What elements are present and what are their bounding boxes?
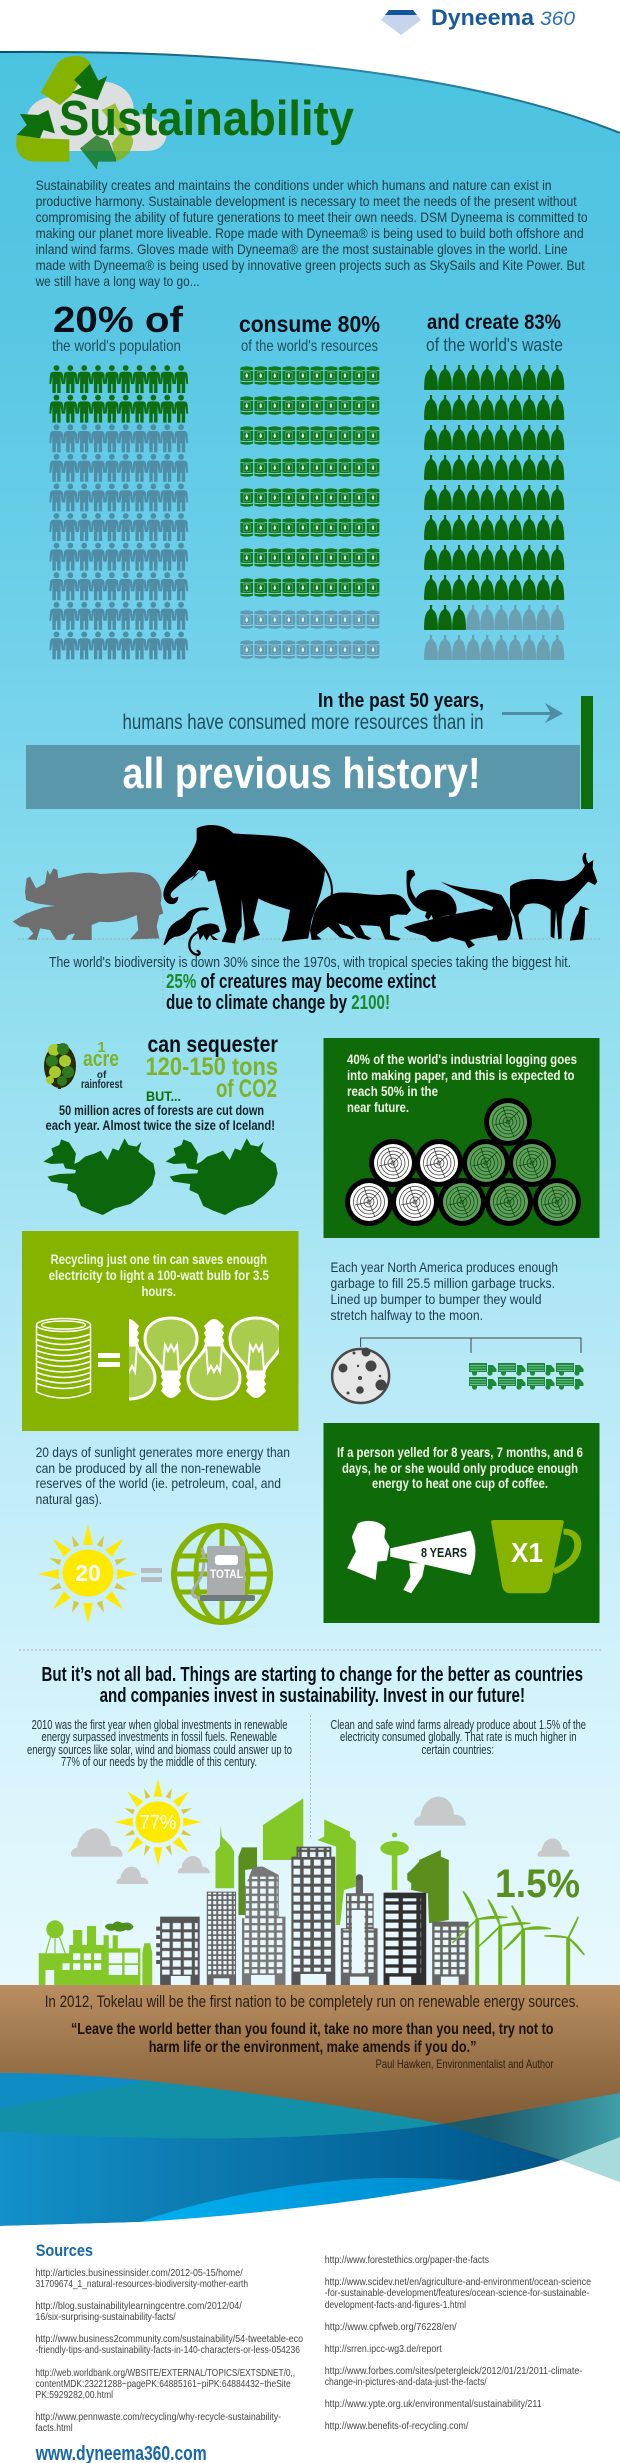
icon: globe with fuel pump xyxy=(172,1526,272,1622)
icon: chameleon xyxy=(197,923,220,941)
intro text: Sustainability creates and maintains the conditions under which humans and nature can exist in xyxy=(36,177,552,193)
panel: rainforest: rainforest xyxy=(81,1079,123,1091)
banner: all previous history xyxy=(26,696,593,809)
wind turbines xyxy=(453,1892,584,1985)
quote xyxy=(71,2021,554,2056)
icon: clouds xyxy=(71,1797,570,1884)
decorative waves xyxy=(0,2073,620,2226)
icon: cormorant xyxy=(570,906,590,941)
panel: rainforest: 120-150 tons xyxy=(146,1053,278,1081)
quote: harm life or the environment, make amends if you do.” xyxy=(149,2039,476,2056)
icon: antelope xyxy=(510,853,597,939)
quote attribution: Paul Hawken, Environmentalist and Author xyxy=(376,2057,554,2071)
icon: sun 77%: 77% xyxy=(140,1812,177,1834)
sources list left: 16/six-surprising-sustainability-facts/ xyxy=(36,2311,176,2323)
panel: recycling a tin can: electricity to light a 100-watt bulb for 3.5 xyxy=(49,1267,269,1283)
cloud xyxy=(26,81,167,151)
icon: tree xyxy=(44,1043,76,1089)
logo: Dyneema 360: 360 xyxy=(540,9,575,30)
panel: rainforest: of CO2 xyxy=(216,1075,277,1103)
icon: tin can xyxy=(36,1318,90,1398)
icon: coffee mug xyxy=(491,1520,578,1593)
heading: in the past 50 years: In the past 50 years, xyxy=(318,690,484,712)
icon: sun 20: 20 xyxy=(75,1560,101,1586)
sunlight text: natural gas). xyxy=(36,1491,102,1507)
panel: paper logging: into making paper, and this is expected to xyxy=(347,1067,574,1083)
sunlight text xyxy=(36,1444,290,1507)
panel: yelling and coffee: energy to heat one cup of coffee. xyxy=(372,1475,548,1491)
panel: rainforest: can sequester xyxy=(148,1031,278,1057)
icon: recycling symbol over cloud xyxy=(16,56,167,169)
icon: moon xyxy=(332,1348,389,1403)
illustration: endangered animals, right group xyxy=(310,853,597,948)
sunlight text: 20 days of sunlight generates more energy than xyxy=(36,1444,290,1460)
sources list left: contentMDK:23221288~pagePK:64885161~piPK:64884432~theSite xyxy=(36,2378,291,2390)
icon: toucan xyxy=(163,907,209,945)
chart: barrels pictogram xyxy=(240,366,379,659)
heading: in the past 50 years xyxy=(122,690,484,734)
stat: create 83% of waste: and create 83% xyxy=(427,311,561,334)
panel: rainforest: BUT... xyxy=(146,1088,181,1104)
garbage text: Each year North America produces enough xyxy=(330,1259,558,1275)
panel: yelling and coffee: 8 YEARS xyxy=(421,1545,467,1560)
icon: crocodile xyxy=(404,882,513,948)
sources list left: facts.html xyxy=(36,2422,73,2434)
panel: rainforest: acre xyxy=(83,1046,119,1071)
sources list right: http://srren.ipcc-wg3.de/report xyxy=(325,2343,442,2355)
stat: 1.5%: 1.5% xyxy=(495,1862,580,1906)
icon: grey equals xyxy=(141,1568,162,1582)
arrow band top xyxy=(41,56,91,105)
sources list right: change-in-pictures-and-data-just-the-facts/ xyxy=(325,2376,487,2388)
sources list left: http://www.business2community.com/sustainability/54-tweetable-eco xyxy=(36,2333,303,2345)
sources list left: PK:5929282,00.html xyxy=(36,2389,113,2401)
text: renewable investment: energy surpassed investments in fossil fuels. Renewable xyxy=(42,1730,277,1744)
icon: Iceland maps xyxy=(43,1138,278,1215)
panel: rainforest: each year. Almost twice the size of Iceland! xyxy=(46,1117,275,1133)
icon: person with megaphone xyxy=(347,1521,475,1593)
arrow band left xyxy=(16,135,69,162)
stat: consume 80% of resources: consume 80% xyxy=(239,311,380,337)
background towers xyxy=(215,1798,409,1925)
garbage text: garbage to fill 25.5 million garbage trucks. xyxy=(330,1275,555,1291)
icon: rhino xyxy=(13,868,163,940)
stat: 20% of population xyxy=(49,299,188,659)
panel: yelling and coffee: X1 xyxy=(511,1537,543,1568)
chart: moon distance bracket xyxy=(361,1338,581,1353)
heading: not all bad xyxy=(42,1664,583,1707)
heading: in the past 50 years: humans have consumed more resources than in xyxy=(122,711,484,734)
sunlight text: reserves of the world (ie. petroleum, coal, and xyxy=(36,1475,281,1491)
panel: paper logging: 40% of the world's industrial logging goes xyxy=(347,1051,577,1067)
garbage text xyxy=(330,1259,558,1323)
skyscrapers xyxy=(156,1847,469,1985)
icon: elephant xyxy=(163,825,325,943)
sources list right: http://www.benefits-of-recycling.com/ xyxy=(325,2420,468,2432)
extinction callout xyxy=(166,971,436,1014)
title: Sustainability xyxy=(59,92,354,146)
icon: equals sign xyxy=(98,1353,120,1367)
icon: stacked logs xyxy=(345,1098,581,1226)
garbage text: stretch halfway to the moon. xyxy=(330,1307,483,1323)
arrow head right xyxy=(80,135,116,169)
stat: create 83% of waste: of the world's waste xyxy=(426,335,563,355)
icon: sun 77% xyxy=(114,1778,202,1866)
icon: garbage trucks xyxy=(469,1363,584,1390)
chart: people pictogram xyxy=(49,365,188,659)
sources list left xyxy=(36,2267,303,2434)
sunlight text: can be produced by all the non-renewable xyxy=(36,1460,261,1476)
text: renewable investment: energy sources like solar, wind and biomass could answer up to xyxy=(27,1743,292,1757)
panel: yelling and coffee xyxy=(324,1423,600,1623)
illustration: endangered animals, left group xyxy=(13,825,332,955)
panel: paper logging: near future. xyxy=(347,1099,409,1115)
sources list left: http://www.pennwaste.com/recycling/why-recycle-sustainability- xyxy=(36,2411,281,2423)
arrow band right xyxy=(102,103,133,162)
sources list right: http://www.ypte.org.uk/environmental/sustainability/211 xyxy=(325,2398,542,2410)
dotted divider xyxy=(19,1649,601,1651)
panel: recycling a tin can: Recycling just one tin can saves enough xyxy=(51,1251,267,1267)
icon: ostrich xyxy=(407,870,457,920)
logo: Dyneema 360: Dyneema xyxy=(431,5,535,30)
panel: paper logging xyxy=(324,1038,600,1238)
panel: rainforest: 50 million acres of forests are cut down xyxy=(59,1102,264,1118)
arrow xyxy=(502,703,563,723)
icon: globe with fuel pump: TOTAL xyxy=(210,1567,243,1581)
sources list right: http://www.cpfweb.org/76228/en/ xyxy=(325,2321,457,2333)
banner: all previous history: all previous history! xyxy=(122,749,480,798)
text: wind farms: certain countries: xyxy=(422,1743,494,1757)
curved top edge xyxy=(0,52,620,133)
panel: recycling a tin can: hours. xyxy=(142,1283,176,1299)
text: wind farms xyxy=(330,1718,586,1757)
panel: rainforest xyxy=(43,1031,278,1215)
stat: create 83% of waste xyxy=(424,311,564,660)
chart: garbage bags pictogram xyxy=(424,365,564,660)
extinction callout: 25% of creatures may become extinct xyxy=(166,971,436,993)
sources list right: development-facts-and-figures-1.html xyxy=(325,2299,466,2311)
sources list left: http://web.worldbank.org/WBSITE/EXTERNAL/TOPICS/EXTSDNET/0,, xyxy=(36,2367,295,2379)
icon: sun 20 xyxy=(38,1524,138,1624)
text: renewable investment: 2010 was the first year when global investments in renewable xyxy=(32,1718,288,1732)
sources list left: http://blog.sustainabilitylearningcentre.com/2012/04/ xyxy=(36,2300,242,2312)
sources list right: http://www.forbes.com/sites/petergleick/2012/01/21/2011-climate- xyxy=(325,2365,583,2377)
panel: rainforest: of xyxy=(97,1070,107,1081)
arrow head top xyxy=(72,64,107,100)
intro text xyxy=(35,177,588,289)
stat: 20% of population: the world's population xyxy=(52,338,181,355)
icon: tiger xyxy=(310,892,411,941)
illustration: green city xyxy=(39,1797,584,1985)
text: renewable investment xyxy=(27,1718,292,1769)
factory xyxy=(39,1920,152,1985)
intro text: we still have a long way to go... xyxy=(35,273,200,289)
sources list left: http://articles.businessinsider.com/2012-05-15/home/ xyxy=(36,2267,243,2279)
arrow head left xyxy=(17,110,55,138)
sources list right: http://www.forestethics.org/paper-the-facts xyxy=(325,2254,489,2266)
panel: paper logging: reach 50% in the xyxy=(347,1083,438,1099)
vertical divider xyxy=(310,1715,312,1837)
text: renewable investment: 77% of our needs by the middle of this century. xyxy=(61,1755,257,1769)
sources list left: -friendly-tips-and-sustainability-facts-in-140-characters-or-less-054236 xyxy=(36,2344,300,2356)
soil band xyxy=(0,1985,620,2200)
logo: Dyneema 360 xyxy=(381,5,575,35)
garbage text: Lined up bumper to bumper they would xyxy=(330,1291,542,1307)
sources heading: Sources xyxy=(36,2241,93,2260)
sources list left: 31709674_1_natural-resources-biodiversity-mother-earth xyxy=(36,2278,248,2290)
ground line xyxy=(18,939,601,1008)
stat: consume 80% of resources: of the world's resources xyxy=(241,338,378,355)
sources list right xyxy=(325,2254,591,2432)
extinction callout: due to climate change by 2100! xyxy=(166,992,390,1014)
panel: rainforest: 1 xyxy=(97,1039,106,1056)
stat: consume 80% of resources xyxy=(239,311,380,659)
white footer background xyxy=(0,2160,620,2463)
panel: recycling a tin can xyxy=(22,1231,298,1431)
stat: 20% of population: 20% of xyxy=(53,299,184,340)
icon: light bulbs xyxy=(129,1316,279,1400)
